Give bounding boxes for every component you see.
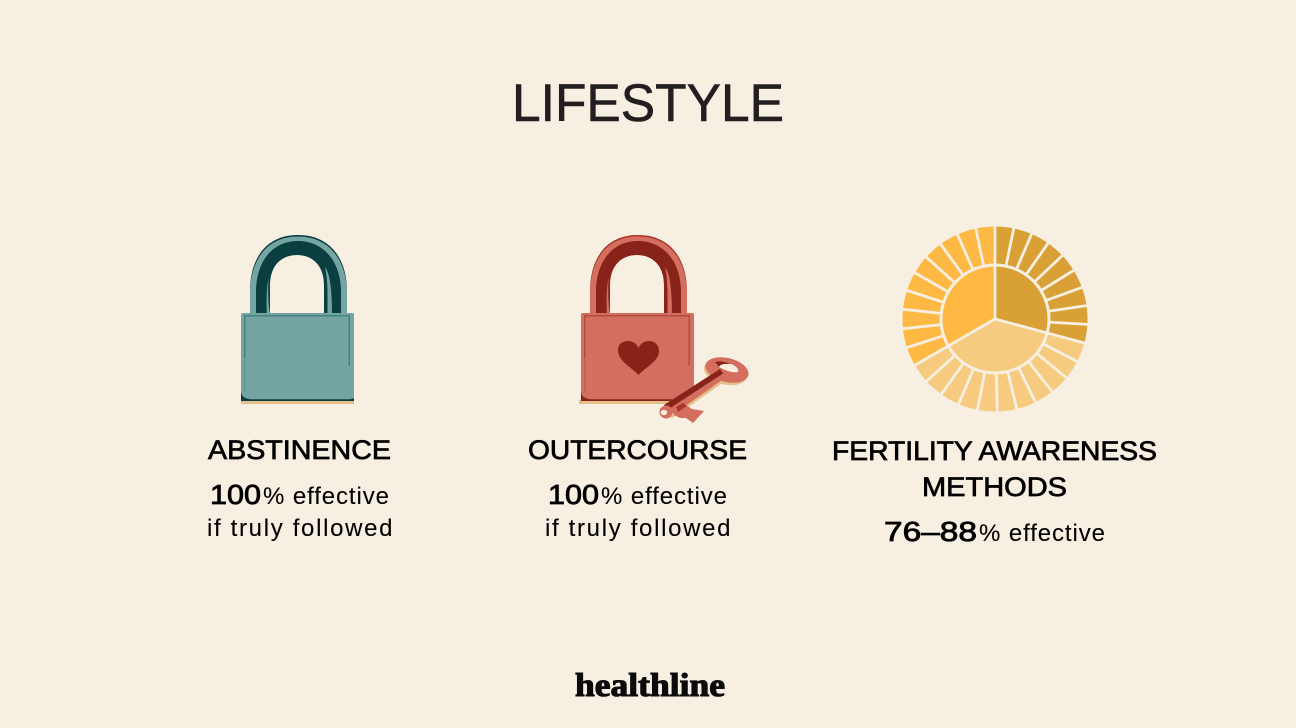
icon: key (659, 353, 751, 423)
stat: outercourse effectiveness (545, 479, 730, 542)
stat: abstinence effectiveness: if truly followed (207, 515, 392, 542)
stat: abstinence effectiveness: 100 (210, 479, 261, 510)
heading: fertility awareness methods: METHODS (922, 472, 1067, 502)
stat: fertility awareness effectiveness: 76–88 (884, 516, 977, 547)
heading: fertility awareness methods (832, 436, 1157, 502)
stat: outercourse effectiveness: 100 (548, 479, 599, 510)
icon: teal padlock (241, 235, 354, 404)
stat: outercourse effectiveness: % effective (601, 483, 727, 510)
stat: outercourse effectiveness: if truly followed (545, 515, 730, 542)
stat: fertility awareness effectiveness: % effective (979, 520, 1105, 547)
heading: outercourse: OUTERCOURSE (528, 435, 747, 465)
logo: healthline: healthline (575, 668, 725, 704)
icon: fertility cycle wheel (901, 224, 1090, 414)
stat: fertility awareness effectiveness (884, 516, 1105, 547)
icon: coral padlock with heart and key (579, 235, 751, 423)
heading: abstinence: ABSTINENCE (208, 435, 391, 465)
icon: heart (618, 341, 659, 375)
heading: fertility awareness methods: FERTILITY AWARENESS (832, 436, 1157, 466)
stat: abstinence effectiveness (207, 479, 392, 542)
title: LIFESTYLE (512, 74, 784, 133)
stat: abstinence effectiveness: % effective (263, 483, 389, 510)
